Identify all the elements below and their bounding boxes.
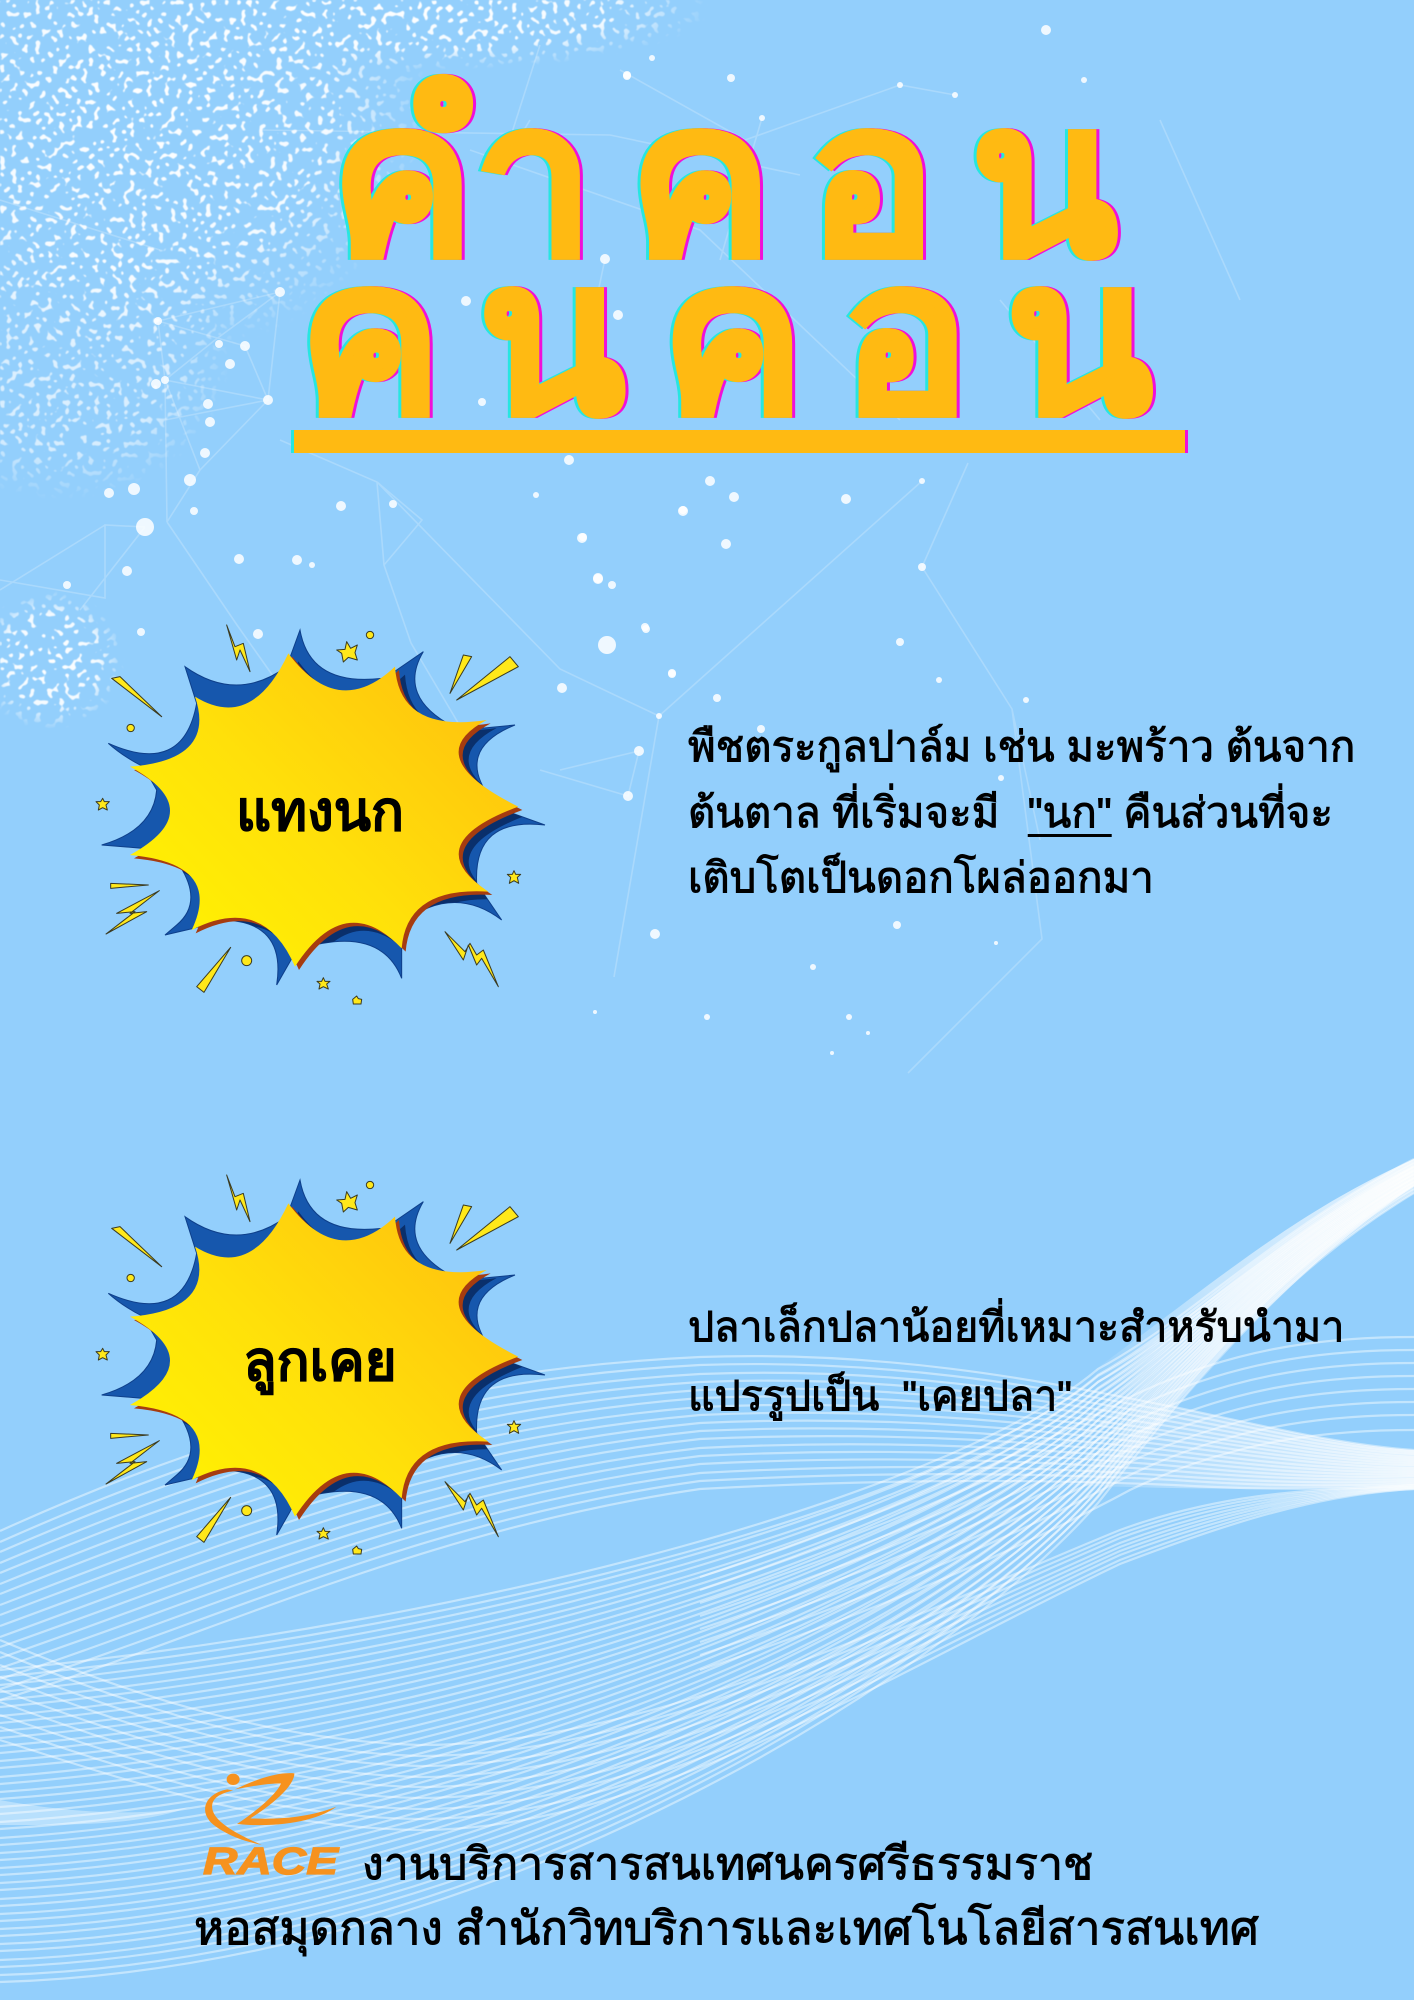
wave ribbons	[1096, 1159, 1414, 1496]
definition text 2	[688, 1298, 1344, 1421]
logo: RACE: RACE	[203, 1841, 340, 1883]
title line 1: คำคอน	[331, 60, 1152, 300]
definition text 2: แปรรูปเป็น "เคยปลา"	[688, 1373, 1072, 1419]
definition text 1: เติบโตเป็นดอกโผล่ออกมา	[688, 854, 1154, 901]
title line 2: คนคอน	[299, 218, 1189, 458]
label: burst 2: ลูกเคย	[243, 1331, 397, 1392]
label: burst 1: แทงนก	[236, 781, 404, 842]
footer line 1: งานบริการสารสนเทศนครศรีธรรมราช	[362, 1840, 1093, 1889]
definition text 2: ปลาเล็กปลาน้อยที่เหมาะสำหรับนำมา	[688, 1304, 1344, 1350]
title: underline bar	[291, 430, 1188, 453]
burst badge 1	[96, 624, 546, 1004]
definition text 1	[688, 723, 1355, 901]
definition text 1: พืชตระกูลปาล์ม เช่น มะพร้าว ต้นจาก	[688, 723, 1355, 770]
burst badge 2	[96, 1174, 546, 1554]
footer line 2: หอสมุดกลาง สำนักวิทบริการและเทศโนโลยีสารสนเทศ	[194, 1903, 1259, 1954]
definition text 1: ต้นตาล ที่เริ่มจะมี "นก" คืนส่วนที่จะ	[688, 788, 1333, 836]
